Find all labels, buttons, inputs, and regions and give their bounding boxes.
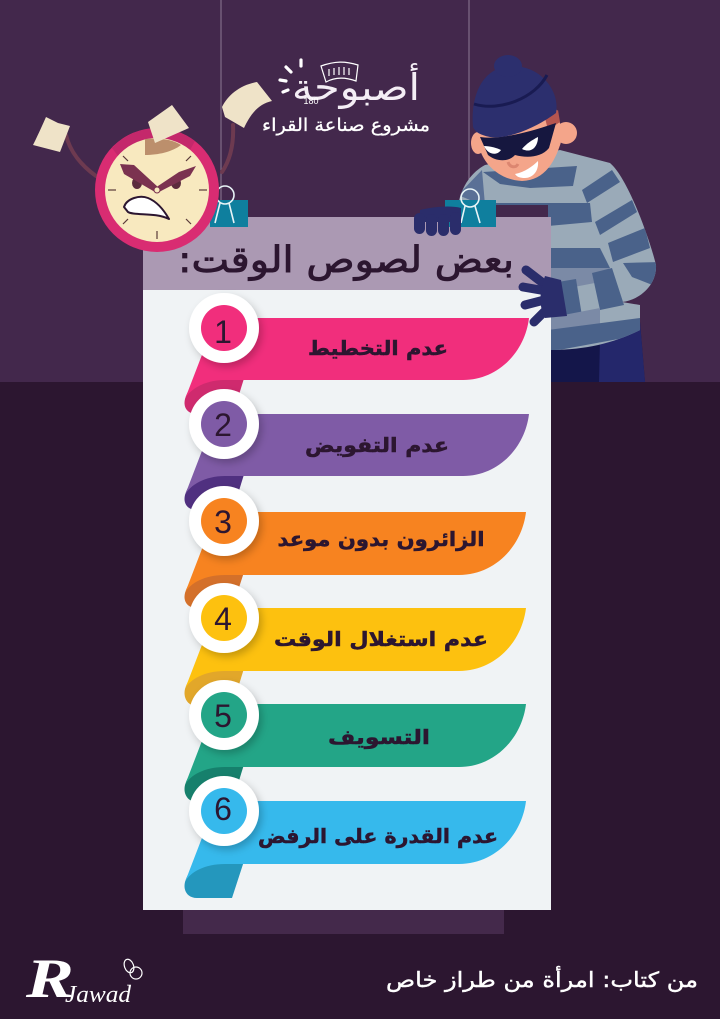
thief lower glove <box>523 270 567 322</box>
badge 2: 2 <box>214 407 232 443</box>
source credit: من كتاب: امرأة من طراز خاص <box>386 966 698 992</box>
striped sweater <box>459 150 656 350</box>
badge 4: 4 <box>214 601 232 637</box>
logo subtitle: مشروع صناعة القراء <box>262 115 430 136</box>
face <box>478 108 563 181</box>
ribbon 4 band <box>185 608 526 689</box>
icon: butterfly <box>122 958 142 979</box>
mask eyes <box>484 146 501 154</box>
clock mouth <box>124 197 169 219</box>
logo wordmark: أصبوحة <box>292 63 420 109</box>
ribbon 4 label: عدم استغلال الوقت <box>274 627 488 651</box>
badge 1 <box>189 293 259 363</box>
clock centre pin <box>154 187 160 193</box>
paper right <box>222 82 272 128</box>
clock ring shade <box>112 128 195 156</box>
paper left <box>33 117 70 152</box>
thief body <box>450 55 660 382</box>
logo initial R: R <box>25 948 74 1010</box>
logo name: Jawad <box>65 982 132 1008</box>
head <box>471 55 577 181</box>
clock eye right <box>171 177 181 189</box>
ribbon 6 <box>184 801 526 898</box>
nose <box>508 162 518 167</box>
clock ring <box>95 128 219 252</box>
board shadow <box>183 905 504 934</box>
ribbon 1 label: عدم التخطيط <box>308 336 448 360</box>
badge 4 <box>189 583 259 653</box>
badge 6: 6 <box>214 791 232 827</box>
ribbon 2 band <box>185 414 529 495</box>
badge 3 <box>189 486 259 556</box>
hanging string left <box>220 0 222 200</box>
mask <box>480 123 556 160</box>
ribbon 5 fold <box>184 758 246 802</box>
badge 6 <box>189 776 259 846</box>
ribbon 6 band <box>185 801 526 882</box>
clock ticks <box>108 156 207 239</box>
ribbon 3 fold <box>184 566 246 608</box>
beanie pompom <box>494 55 522 77</box>
icon: open book <box>321 62 358 82</box>
heading: بعض لصوص الوقت: <box>178 240 514 281</box>
ribbon 4 fold <box>184 662 246 706</box>
background upper wall <box>0 0 720 382</box>
thief upper glove <box>414 207 461 236</box>
hanging string right <box>468 0 470 200</box>
ears <box>471 132 485 154</box>
ribbon 3 <box>184 512 526 608</box>
clock top patch <box>145 139 181 155</box>
badge 3: 3 <box>214 504 232 540</box>
ribbon 5 <box>184 704 526 802</box>
clock eyebrow hands <box>120 164 196 192</box>
ribbon 1 band <box>185 318 529 399</box>
ribbon 2 fold <box>184 468 246 510</box>
board body <box>143 290 551 910</box>
badge 5 <box>189 680 259 750</box>
ribbon 4 <box>184 608 526 706</box>
ribbon 6 label: عدم القدرة على الرفض <box>258 824 498 848</box>
clock arms <box>66 125 233 176</box>
beanie <box>473 66 557 137</box>
ribbon 5 label: التسويف <box>328 725 430 749</box>
pants <box>548 322 645 382</box>
author logo <box>25 948 142 1010</box>
hair band <box>545 110 560 130</box>
clock face <box>105 138 209 242</box>
ribbon 1 fold <box>184 372 246 414</box>
background lower floor <box>0 382 720 1019</box>
smile <box>515 161 538 178</box>
logo small number: 180 <box>303 96 319 106</box>
badge 1: 1 <box>214 314 232 350</box>
ribbon 3 label: الزائرون بدون موعد <box>278 527 484 551</box>
beanie fold <box>474 75 547 106</box>
thief right binder clip <box>445 189 496 227</box>
ribbon 6 fold <box>184 855 246 898</box>
board <box>143 217 551 910</box>
angry clock <box>33 82 272 252</box>
badge 5: 5 <box>214 698 232 734</box>
left binder clip <box>210 186 248 227</box>
ribbon 5 band <box>185 704 526 785</box>
clock eyes <box>132 177 142 189</box>
logo <box>280 60 420 109</box>
ribbon 2 <box>184 414 529 510</box>
badge 2 <box>189 389 259 459</box>
ribbon 1 <box>184 318 529 414</box>
ribbon 2 label: عدم التفويض <box>305 433 449 457</box>
ribbon 3 band <box>185 512 526 593</box>
icon: sun rays <box>280 60 301 92</box>
board header <box>143 217 551 290</box>
paper middle <box>148 105 189 143</box>
